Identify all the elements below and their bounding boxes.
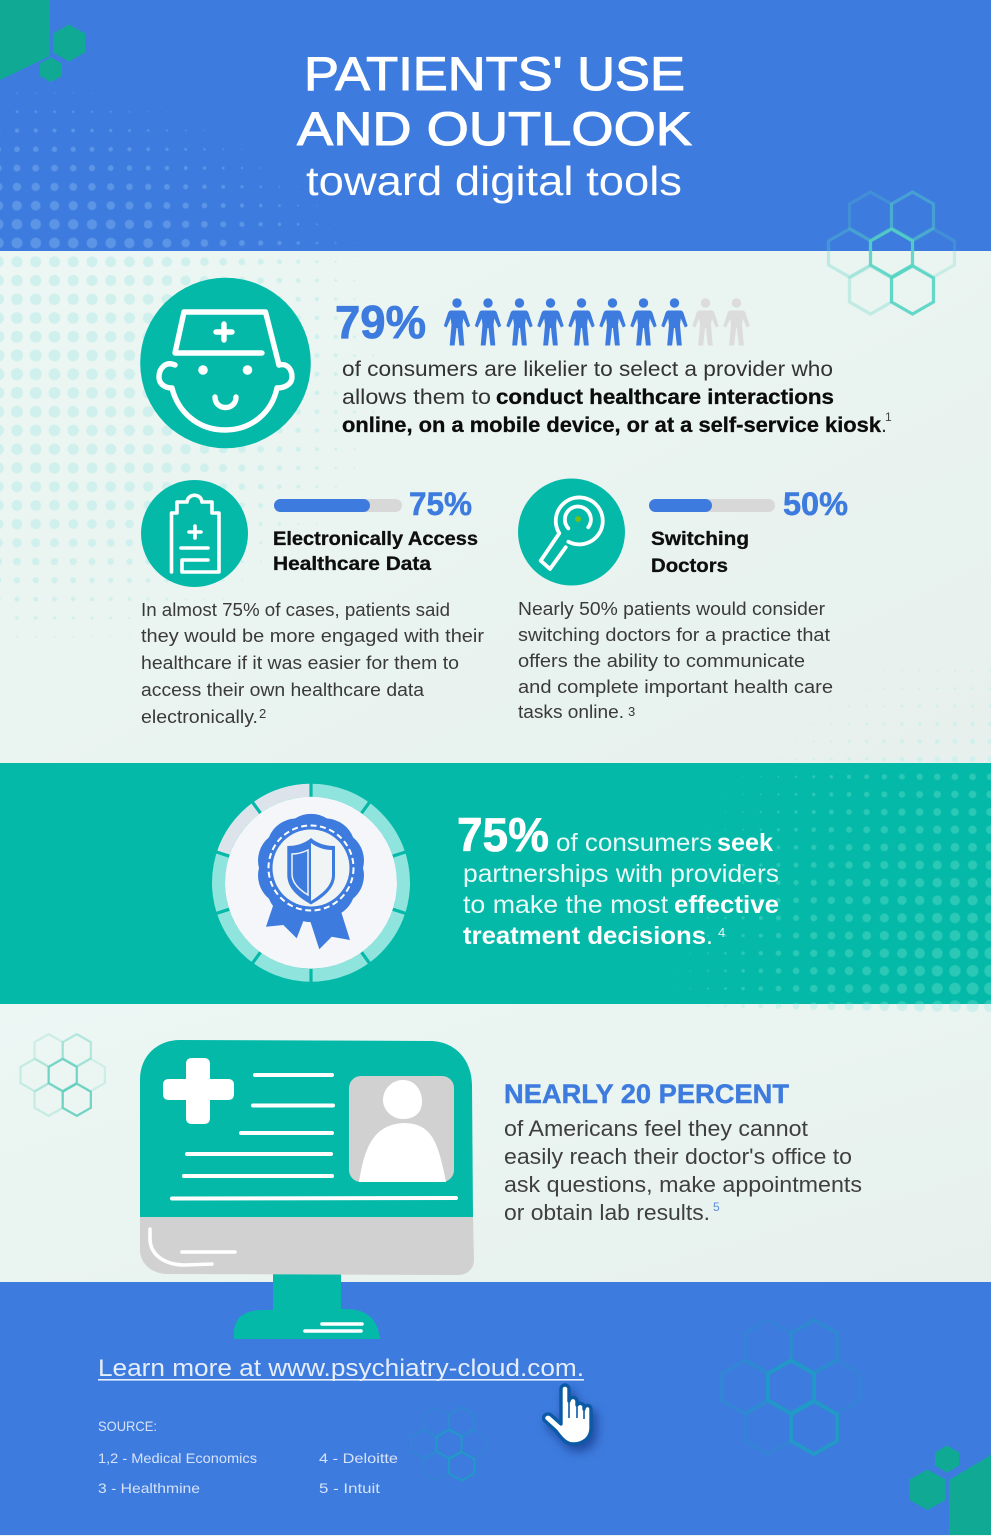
heading (651, 528, 749, 577)
progress bar 75% (274, 499, 402, 512)
text block: nearly 20 percent: NEARLY 20 PERCENT (504, 1079, 790, 1109)
heading: Electronically Access (273, 528, 478, 550)
icon: corner hexagons top left (0, 0, 85, 82)
icon: magnifier (518, 478, 625, 586)
body text: In almost 75% of cases, patients said (141, 600, 450, 620)
callout: 75% of consumers: partnerships with providers (463, 860, 779, 888)
body text: switching doctors for a practice that (518, 625, 830, 645)
text block: nearly 20 percent (504, 1079, 862, 1225)
text block: nearly 20 percent: 5 (713, 1200, 720, 1214)
sources: 5 - Intuit (319, 1480, 380, 1496)
heading (273, 528, 478, 575)
text block: nearly 20 percent: easily reach their doctor's office to (504, 1144, 852, 1169)
50% value: 50% (783, 486, 848, 522)
decoration: hexagon cluster left (20, 1034, 105, 1116)
callout: 75% of consumers (457, 808, 779, 950)
rosette seal (258, 814, 364, 922)
title: PATIENTS' USE (304, 47, 685, 100)
sources: SOURCE: (98, 1418, 157, 1434)
footer background (0, 1282, 991, 1535)
79% description: conduct healthcare interactions (496, 385, 834, 409)
light section background (0, 251, 991, 763)
icon: corner hexagons bottom right (910, 1446, 991, 1535)
heading: Healthcare Data (273, 553, 431, 575)
callout: 75% of consumers: of consumers (556, 829, 712, 857)
panel: 79% statistic (140, 278, 892, 448)
79% description: 1 (885, 410, 892, 424)
body text: they would be more engaged with their (141, 626, 484, 646)
monitor screen (140, 1040, 473, 1217)
icon: pointing hand cursor (544, 1385, 591, 1444)
body text: healthcare if it was easier for them to (141, 653, 459, 673)
body text: offers the ability to communicate (518, 651, 805, 671)
callout: 75% of consumers: 75% (457, 808, 549, 861)
patient photo (349, 1076, 454, 1182)
text block: nearly 20 percent: or obtain lab results. (504, 1200, 710, 1225)
callout: 75% of consumers: . (706, 922, 713, 950)
record lines (172, 1075, 456, 1198)
monitor chin (140, 1216, 474, 1275)
79% description: of consumers are likelier to select a provider who (342, 357, 833, 381)
rosette ribbons (266, 905, 350, 949)
decoration: hexagon cluster footer small (411, 1407, 487, 1481)
body text: electronically. (141, 707, 258, 727)
79% description: online, on a mobile device, or at a self-service kiosk (342, 413, 881, 437)
monitor stand (234, 1270, 380, 1339)
reflection strokes (150, 1229, 362, 1331)
people pictogram: 8 of 10 highlighted (444, 298, 750, 346)
panel: electronically access healthcare data (141, 480, 484, 727)
body text: 3 (628, 704, 635, 719)
medical cross (163, 1058, 234, 1124)
icon: clipboard (141, 480, 248, 587)
title (297, 47, 692, 204)
panel: switching doctors (518, 478, 848, 722)
callout: 75% of consumers: seek (717, 829, 773, 857)
body text (518, 599, 833, 722)
decoration: hexagon cluster footer right (722, 1320, 860, 1454)
title: AND OUTLOOK (297, 102, 692, 155)
heading: Switching (651, 528, 749, 550)
79% value: 79% (335, 296, 426, 348)
lower light section background (0, 1004, 991, 1282)
75% value: 75% (409, 486, 472, 522)
callout: 75% of consumers: treatment decisions (463, 922, 706, 950)
callout: 75% of consumers: effective (674, 891, 779, 919)
body text: access their own healthcare data (141, 680, 425, 700)
sources: 3 - Healthmine (98, 1480, 200, 1496)
icon: doctor face (140, 278, 311, 448)
progress bar 50% (649, 499, 775, 512)
link: learn more: Learn more at www.psychiatry-cloud.com. (98, 1355, 584, 1382)
decoration: hexagon cluster top right (828, 192, 954, 314)
callout: 75% of consumers: 4 (718, 925, 725, 940)
text block: nearly 20 percent: of Americans feel they cannot (504, 1116, 808, 1141)
icon: computer monitor with patient record (140, 1040, 474, 1339)
callout: 75% of consumers: to make the most (463, 891, 668, 919)
heading: Doctors (651, 555, 728, 577)
text block: nearly 20 percent: ask questions, make appointments (504, 1172, 862, 1197)
body text (141, 600, 484, 727)
title: toward digital tools (306, 158, 682, 204)
body text: and complete important health care (518, 677, 833, 697)
body text: tasks online. (518, 702, 624, 722)
79% description (342, 357, 892, 437)
79% description: . (881, 413, 887, 437)
body text: 2 (259, 706, 266, 721)
shield (287, 838, 335, 904)
icon: badge with progress ring (216, 783, 406, 982)
sources (98, 1418, 398, 1496)
header background (0, 0, 991, 251)
body text: Nearly 50% patients would consider (518, 599, 825, 619)
sources: 4 - Deloitte (319, 1450, 398, 1466)
79% description: allows them to (342, 385, 491, 409)
sources: 1,2 - Medical Economics (98, 1450, 257, 1466)
teal band background (0, 763, 991, 1004)
